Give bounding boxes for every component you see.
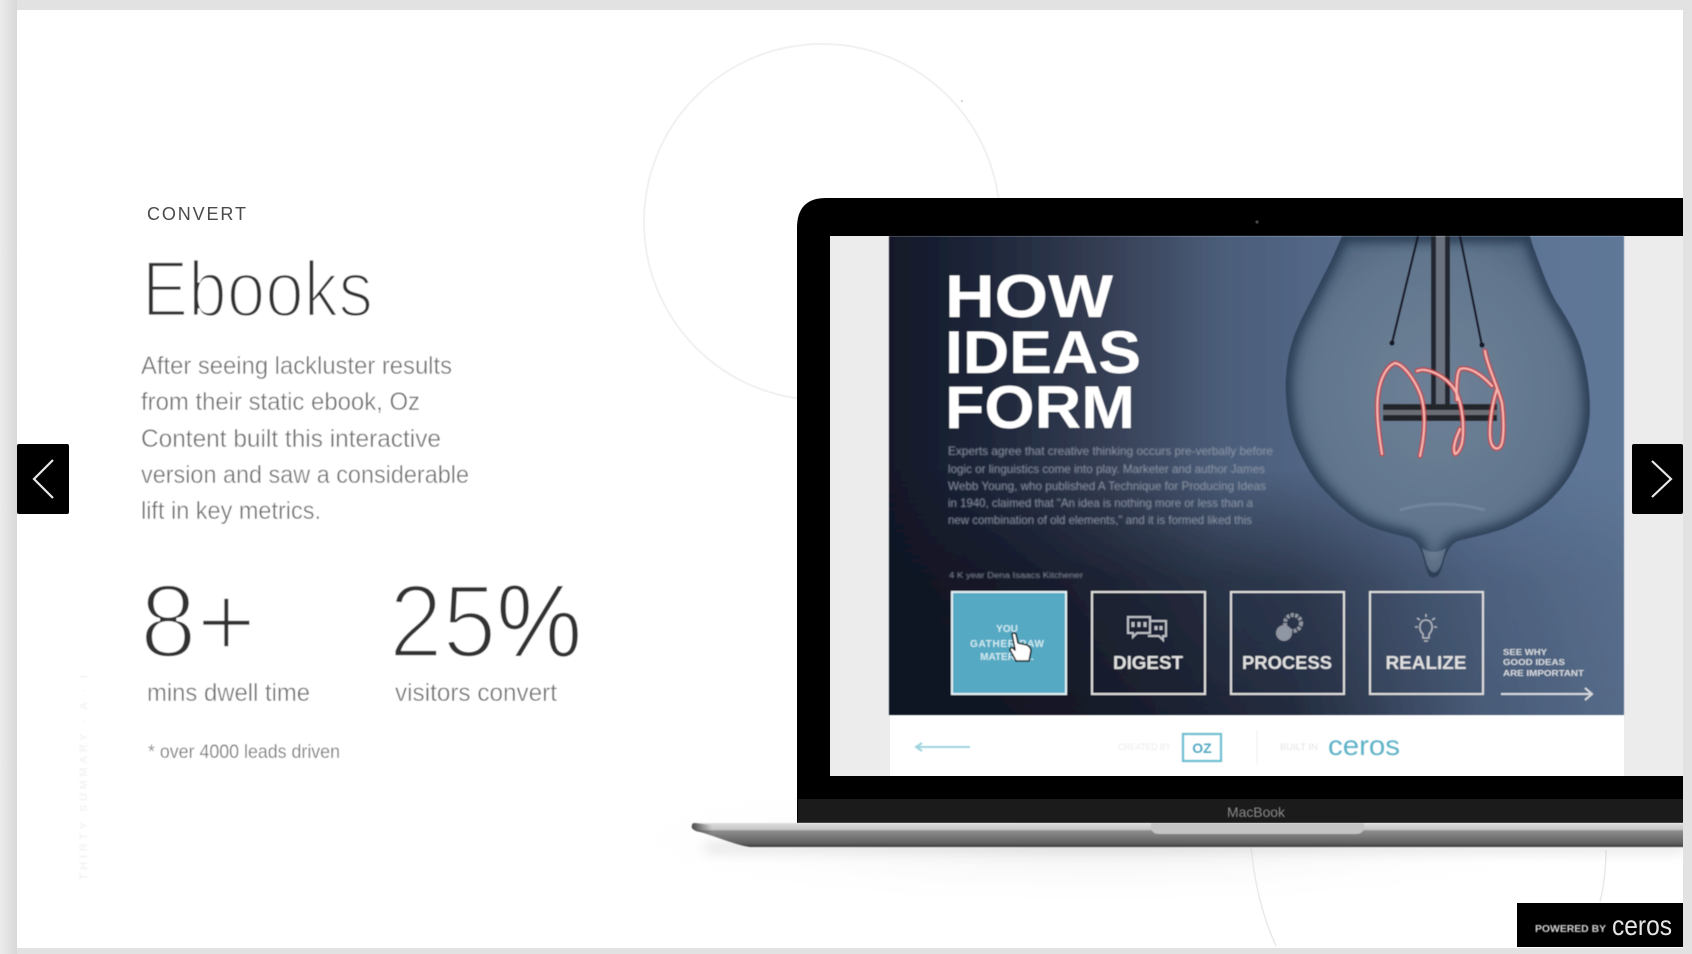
button: digest: DIGEST bbox=[1113, 653, 1183, 673]
body text bbox=[141, 352, 469, 525]
button: realize bbox=[1370, 592, 1483, 694]
decorative circle behind laptop bbox=[644, 44, 1606, 946]
cover paragraph: Webb Young, who published A Technique for Producing Ideas bbox=[948, 479, 1266, 493]
button: process bbox=[1231, 592, 1344, 694]
stat: visitors convert: 25% bbox=[389, 564, 582, 680]
laptop mockup bbox=[692, 198, 1684, 847]
cover bottom shade bbox=[889, 470, 1624, 715]
footnote: * over 4000 leads driven bbox=[148, 742, 340, 763]
filaments bbox=[1377, 351, 1504, 456]
button: digest bbox=[1092, 592, 1205, 694]
cover heading bbox=[948, 274, 1140, 430]
cover paragraph: new combination of old elements," and it is formed liked this bbox=[948, 513, 1252, 527]
cover paragraph: Experts agree that creative thinking occurs pre-verbally before bbox=[948, 444, 1273, 458]
button: realize: REALIZE bbox=[1386, 653, 1466, 673]
cover footer bar bbox=[916, 730, 1400, 765]
stat: visitors convert: visitors convert bbox=[395, 679, 557, 707]
oz logo bbox=[1183, 734, 1221, 761]
cover small caption: 4 K year Dena Isaacs Kitchener bbox=[949, 571, 1083, 580]
button: you gather raw material bbox=[952, 592, 1066, 694]
icon: left chevron bbox=[34, 460, 53, 498]
faint vertical side text: THIRTY SUMMARY · A · I bbox=[78, 675, 90, 880]
icon: idea bulb bbox=[1415, 614, 1437, 641]
button: process: PROCESS bbox=[1242, 653, 1332, 673]
laptop brand: MacBook bbox=[1227, 804, 1286, 820]
created by: CREATED BY bbox=[1118, 742, 1171, 752]
body text: lift in key metrics. bbox=[141, 497, 321, 525]
laptop lid bbox=[797, 198, 1684, 823]
button: you gather raw material: MATERIAL. bbox=[980, 652, 1034, 663]
see why link and arrow: SEE WHY bbox=[1503, 648, 1548, 657]
icon: hand cursor bbox=[1010, 633, 1031, 661]
stat: dwell time: mins dwell time bbox=[147, 679, 310, 707]
see why link and arrow: GOOD IDEAS bbox=[1503, 658, 1566, 667]
next button bbox=[1632, 444, 1683, 514]
see why link and arrow bbox=[1501, 648, 1592, 700]
oz logo: OZ bbox=[1192, 740, 1212, 756]
laptop base bbox=[692, 823, 1684, 847]
stat: dwell time bbox=[146, 585, 310, 702]
powered by badge bbox=[1517, 903, 1683, 947]
icon: right chevron bbox=[1652, 461, 1671, 497]
powered by badge: ceros bbox=[1612, 910, 1672, 941]
ceros logo: ceros bbox=[1328, 730, 1400, 761]
stat: dwell time: 8+ bbox=[140, 564, 256, 680]
button: you gather raw material: GATHER RAW bbox=[970, 639, 1045, 650]
icon: gears bbox=[1277, 615, 1301, 640]
cover paragraph bbox=[948, 444, 1273, 527]
previous button bbox=[17, 444, 69, 514]
body text: Content built this interactive bbox=[141, 425, 441, 453]
back arrow bbox=[916, 743, 970, 751]
ebook cover image bbox=[889, 236, 1624, 715]
cover paragraph: logic or linguistics come into play. Marketer and author James bbox=[948, 462, 1265, 476]
see why link and arrow: ARE IMPORTANT bbox=[1503, 669, 1584, 678]
body text: from their static ebook, Oz bbox=[141, 388, 420, 416]
built in: BUILT IN bbox=[1280, 742, 1318, 752]
crossbar bbox=[1383, 404, 1497, 421]
screen bbox=[830, 236, 1684, 776]
body text: version and saw a considerable bbox=[141, 461, 469, 489]
powered by badge: POWERED BY bbox=[1535, 924, 1606, 935]
lead wires bbox=[1392, 236, 1418, 343]
cover heading: IDEAS bbox=[945, 319, 1141, 386]
section label: CONVERT bbox=[147, 204, 246, 224]
button: you gather raw material: YOU bbox=[996, 624, 1018, 635]
cover heading: FORM bbox=[945, 374, 1135, 441]
stat: visitors convert bbox=[394, 584, 578, 702]
laptop shadow bbox=[705, 840, 1683, 864]
cover heading: HOW bbox=[945, 263, 1113, 330]
cover paragraph: in 1940, claimed that "An idea is nothing more or less than a bbox=[948, 496, 1253, 510]
stem bbox=[1431, 236, 1450, 406]
icon: speech bubbles bbox=[1128, 617, 1166, 640]
title: Ebooks bbox=[142, 244, 373, 333]
body text: After seeing lackluster results bbox=[141, 352, 452, 380]
light bulb bbox=[1286, 236, 1590, 578]
